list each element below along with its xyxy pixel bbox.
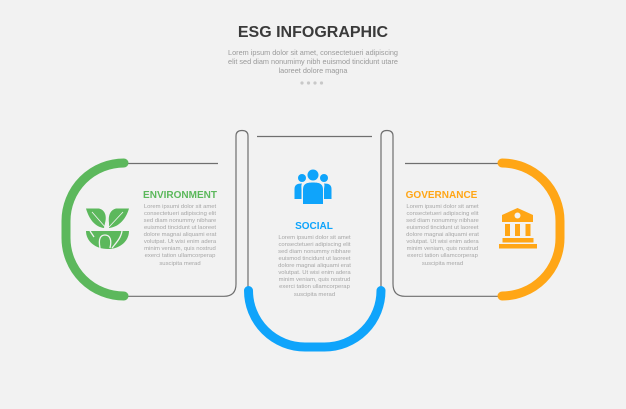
text: governance: exerci tation ullamcorperap: [407, 253, 478, 259]
text: governance: dolore magnai aliquami erat: [406, 232, 479, 238]
green arc: [66, 163, 124, 296]
text: governance: euismod tincidunt ut laoreet: [406, 225, 479, 231]
intro text: laoreet dolore magna: [279, 66, 347, 75]
text: social: suscipita merad: [294, 292, 335, 298]
text: social: [278, 235, 351, 298]
icon: plant in bowl: [86, 208, 129, 249]
text: social: volutpat. Ut wisi enim adera: [278, 270, 351, 276]
gray outline: [125, 130, 500, 296]
text: governance: volutpat. Ut wisi enim adera: [406, 239, 479, 245]
text: environment: suscipita merad: [159, 260, 201, 266]
text: environment: [144, 204, 216, 266]
text: environment: volutpat. Ut wisi enim adera: [144, 239, 216, 245]
text: governance: [406, 204, 479, 266]
intro text: [228, 48, 398, 75]
text: social: exerci tation ullamcorperap: [279, 284, 350, 290]
text: environment: euismod tincidunt ut laoreet: [144, 225, 216, 231]
text: social: consectetueri adipiscing elit: [278, 242, 351, 248]
text: governance: consectetueri adipiscing elit: [406, 211, 479, 217]
icon: institution building: [499, 208, 537, 248]
text: environment: sed diam nonummy nibhare: [144, 218, 216, 224]
title: ESG INFOGRAPHIC: [238, 24, 388, 41]
text: social: dolore magnai aliquami erat: [278, 263, 351, 269]
heading: environment: ENVIRONMENT: [143, 190, 217, 201]
text: environment: exerci tation ullamcorperap: [145, 253, 215, 259]
text: social: sed diam nonummy nibhare: [278, 249, 351, 255]
text: social: Lorem ipsumi dolor sit amet: [278, 235, 351, 241]
blue arc: [248, 290, 381, 347]
icon: people: [294, 170, 332, 204]
text: governance: sed diam nonummy nibhare: [406, 218, 479, 224]
text: environment: consectetueri adipiscing elit: [144, 211, 216, 217]
heading: social: SOCIAL: [295, 221, 333, 232]
text: social: minim veniam, quis nostrud: [279, 277, 350, 283]
text: environment: Lorem ipsumi dolor sit amet: [144, 204, 216, 210]
orange arc: [502, 163, 560, 296]
text: environment: minim veniam, quis nostrud: [144, 246, 216, 252]
intro text: elit sed diam nonumimy nibh euismod tincidunt utare: [228, 57, 398, 66]
heading: governance: GOVERNANCE: [406, 190, 477, 201]
text: environment: dolore magnai aliquami erat: [144, 232, 216, 238]
text: governance: minim veniam, quis nostrud: [407, 246, 478, 252]
text: governance: Lorem ipsumi dolor sit amet: [406, 204, 479, 210]
text: governance: suscipita merad: [422, 260, 463, 266]
text: social: euismod tincidunt ut laoreet: [278, 256, 351, 262]
intro text: Lorem ipsum dolor sit amet, consectetueri adipiscing: [228, 48, 398, 57]
page dots: [300, 82, 323, 84]
